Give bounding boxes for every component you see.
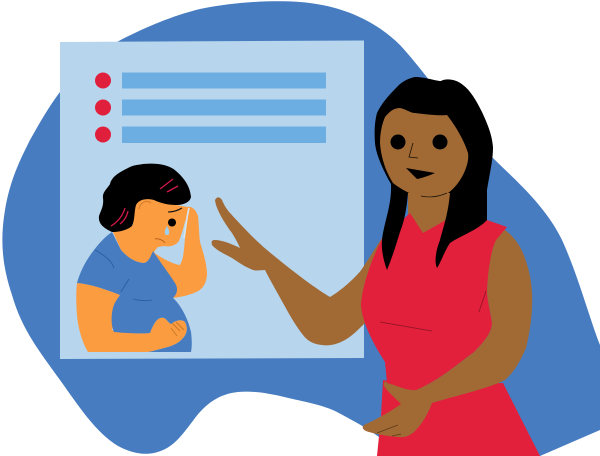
nose (409, 143, 418, 158)
tear (165, 226, 169, 235)
eyebrow (168, 208, 182, 212)
presentation panel (60, 40, 364, 359)
text bar 2 (122, 100, 326, 116)
finger lines (171, 322, 184, 336)
bullet dot 3 (95, 126, 111, 142)
finger lines (377, 425, 401, 436)
red dress bodice (361, 213, 507, 390)
shoulder link (360, 238, 390, 290)
eye (168, 218, 176, 226)
hair highlights (111, 179, 178, 226)
pregnant woman holding her head (76, 164, 207, 352)
pointing arm and hand (212, 197, 380, 345)
right eye (432, 134, 448, 150)
dress creases (380, 291, 486, 331)
bullet dot 1 (95, 72, 111, 88)
neck (408, 190, 453, 236)
tissue highlight (184, 208, 189, 238)
left eye (390, 134, 406, 150)
raised arm and hand (150, 207, 207, 298)
lower arm and hand on belly (76, 283, 187, 352)
presenter woman (212, 77, 540, 456)
clothing creases (95, 250, 152, 301)
face (380, 108, 468, 197)
blue top and belly (77, 232, 192, 352)
ear (139, 201, 151, 209)
hair (375, 77, 493, 270)
bullet dot 2 (95, 100, 111, 116)
smile (406, 168, 435, 179)
face and neck (113, 199, 188, 263)
hair (99, 164, 191, 232)
red skirt (377, 380, 540, 456)
text bar 1 (122, 72, 326, 88)
jaw line (421, 193, 447, 197)
far arm and forearm (363, 227, 532, 437)
text bar 3 (122, 126, 326, 143)
mouth (155, 239, 165, 243)
